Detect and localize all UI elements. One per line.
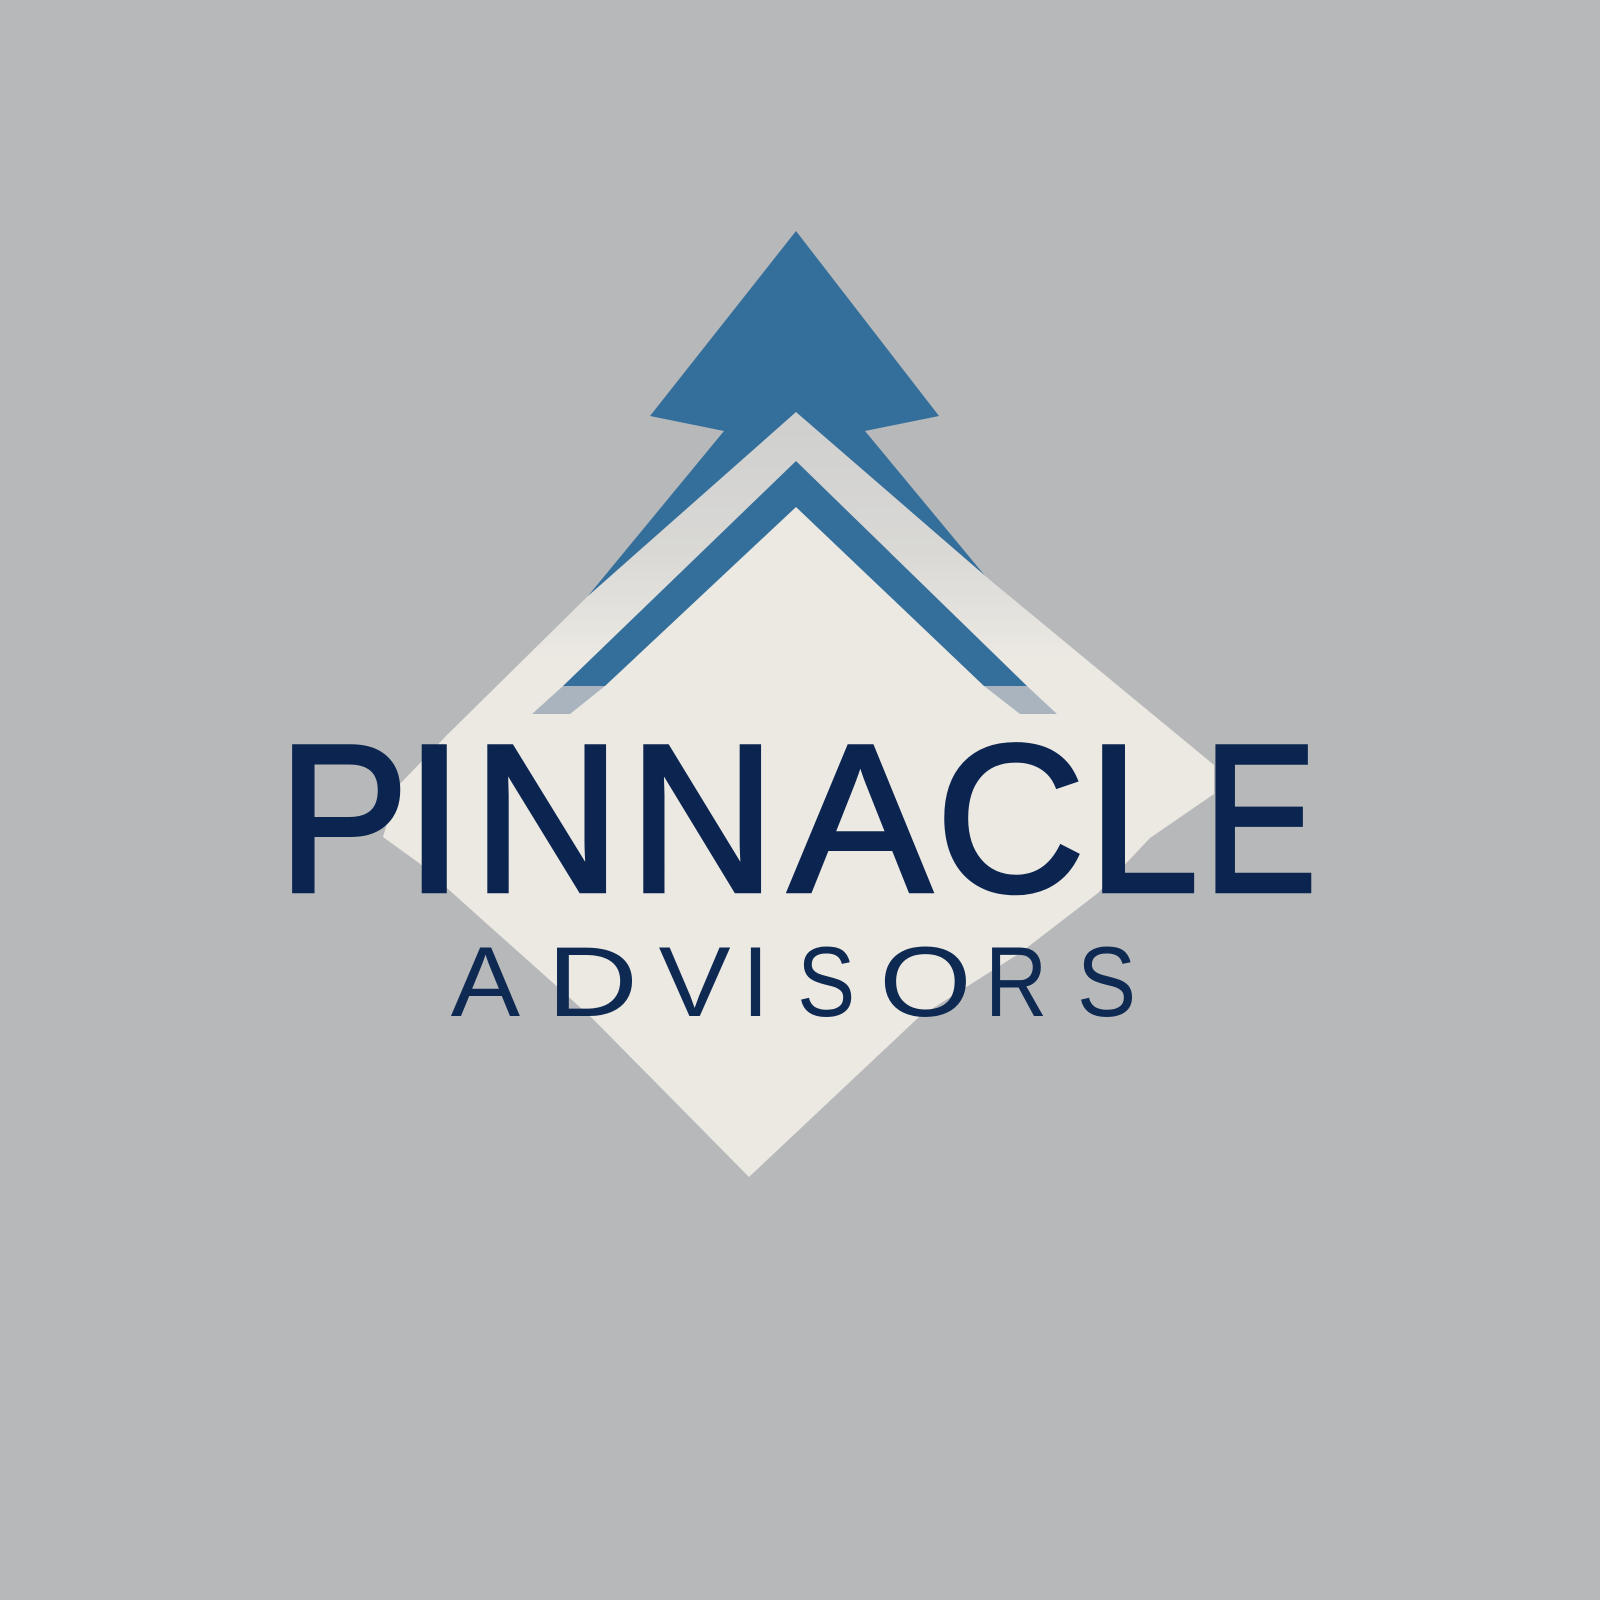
title: PINNACLE: A: [789, 701, 931, 936]
subtitle: ADVISORS: S: [1077, 926, 1136, 1037]
title: PINNACLE: L: [1088, 702, 1199, 936]
subtitle: ADVISORS: [451, 926, 1136, 1038]
title: PINNACLE: N: [629, 701, 775, 936]
icon: upward arrow: [588, 231, 991, 596]
subtitle: ADVISORS: S: [797, 927, 855, 1037]
title: PINNACLE: E: [1203, 702, 1317, 936]
subtitle: ADVISORS: O: [879, 927, 972, 1038]
subtitle: ADVISORS: A: [451, 926, 520, 1037]
chevron inner cream fill: [530, 507, 1060, 740]
chevron left grey tip: [532, 686, 605, 714]
title: PINNACLE: I: [404, 702, 465, 936]
icon: inner chevron: [530, 461, 1060, 740]
subtitle: ADVISORS: V: [659, 926, 731, 1037]
title: PINNACLE: P: [278, 700, 408, 936]
subtitle: ADVISORS: I: [742, 926, 769, 1037]
title: PINNACLE: [278, 700, 1317, 936]
subtitle: ADVISORS: R: [985, 926, 1047, 1037]
subtitle: ADVISORS: D: [547, 927, 638, 1038]
title: PINNACLE: C: [936, 702, 1085, 936]
cream diamond: [383, 412, 1214, 1177]
title: PINNACLE: N: [473, 701, 621, 936]
chevron right grey tip: [984, 686, 1057, 714]
chevron blue body: [563, 461, 1027, 686]
